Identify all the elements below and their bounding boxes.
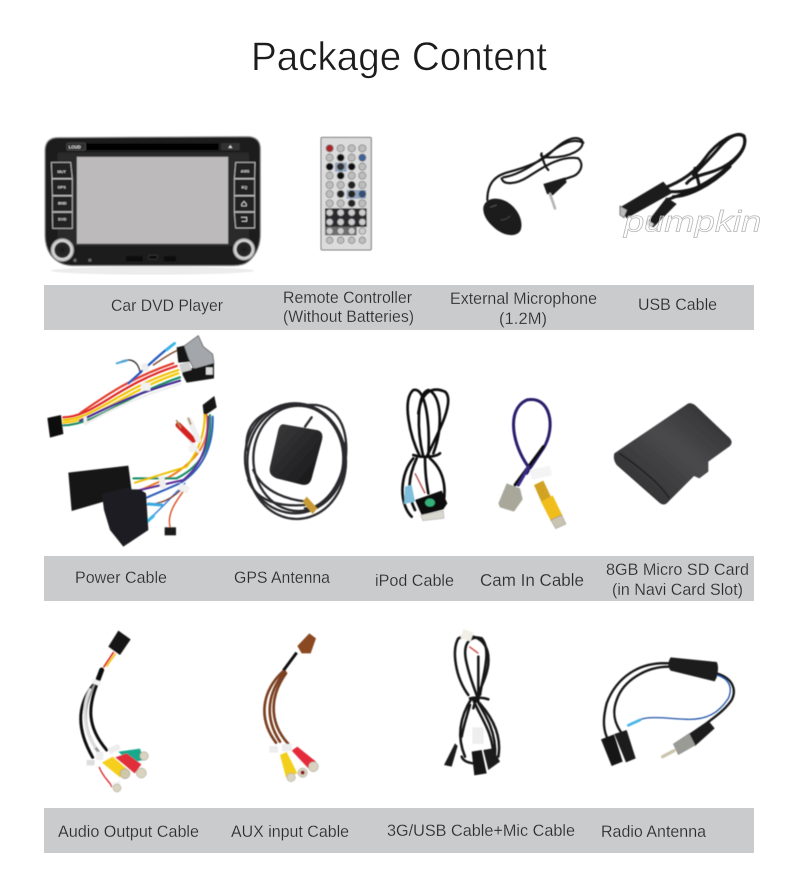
label: 8GB Micro SD Card (in Navi Card Slot)	[606, 561, 749, 599]
title: Package Content	[251, 35, 547, 79]
label bar: row 1	[44, 285, 754, 330]
icon: car DVD player: GPS	[57, 185, 66, 190]
label: Car DVD Player: Car DVD Player	[111, 297, 223, 315]
icon: external microphone	[483, 138, 583, 235]
label: External Microphone (1.2M): (1.2M)	[499, 310, 547, 328]
label: 8GB Micro SD Card (in Navi Card Slot): (in Navi Card Slot)	[612, 581, 743, 599]
label: Audio Output Cable: Audio Output Cable	[58, 823, 199, 841]
label: Remote Controller (Without Batteries): (Without Batteries)	[283, 308, 414, 326]
icon: car DVD player: MUT	[57, 169, 67, 174]
icon: radio antenna	[601, 657, 734, 766]
icon: car DVD player: EQ	[241, 184, 247, 189]
icon: 3G/USB cable + mic cable	[444, 629, 500, 775]
label: iPod Cable: iPod Cable	[375, 572, 454, 590]
icon: car DVD player: DVD	[58, 217, 67, 222]
label: External Microphone (1.2M): External Microphone	[450, 290, 597, 308]
icon: USB cable	[620, 134, 761, 238]
icon: power cable	[47, 336, 217, 547]
label: Cam In Cable: Cam In Cable	[480, 570, 584, 590]
icon: AUX input cable	[264, 633, 318, 782]
label: Radio Antenna: Radio Antenna	[601, 823, 707, 841]
icon: micro SD card	[614, 403, 732, 505]
icon: car DVD player	[45, 137, 260, 275]
label: 8GB Micro SD Card (in Navi Card Slot): 8GB Micro SD Card	[606, 561, 749, 579]
label bar: row 2	[44, 556, 754, 601]
label: 3G/USB Cable+Mic Cable: 3G/USB Cable+Mic Cable	[387, 822, 575, 840]
label: Remote Controller (Without Batteries)	[283, 289, 414, 326]
label bar: row 3	[44, 808, 754, 853]
watermark: Pumpkin: pumpkin	[623, 205, 761, 238]
label: USB Cable: USB Cable	[638, 296, 717, 314]
icon: car DVD player: AMS	[241, 168, 250, 173]
icon: audio output cable	[81, 631, 148, 792]
label: AUX input Cable: AUX input Cable	[231, 823, 349, 841]
label: External Microphone (1.2M)	[450, 290, 597, 328]
label: Power Cable: Power Cable	[75, 569, 167, 587]
icon: cam in cable	[498, 399, 566, 529]
label: Remote Controller (Without Batteries): Remote Controller	[283, 289, 412, 307]
icon: iPod cable	[402, 390, 448, 521]
icon: GPS antenna	[245, 403, 346, 519]
icon: car DVD player: LOUD	[69, 144, 81, 149]
icon: car DVD player: BND	[58, 201, 67, 206]
icon: remote controller	[321, 137, 371, 250]
label: GPS Antenna: GPS Antenna	[234, 569, 331, 587]
